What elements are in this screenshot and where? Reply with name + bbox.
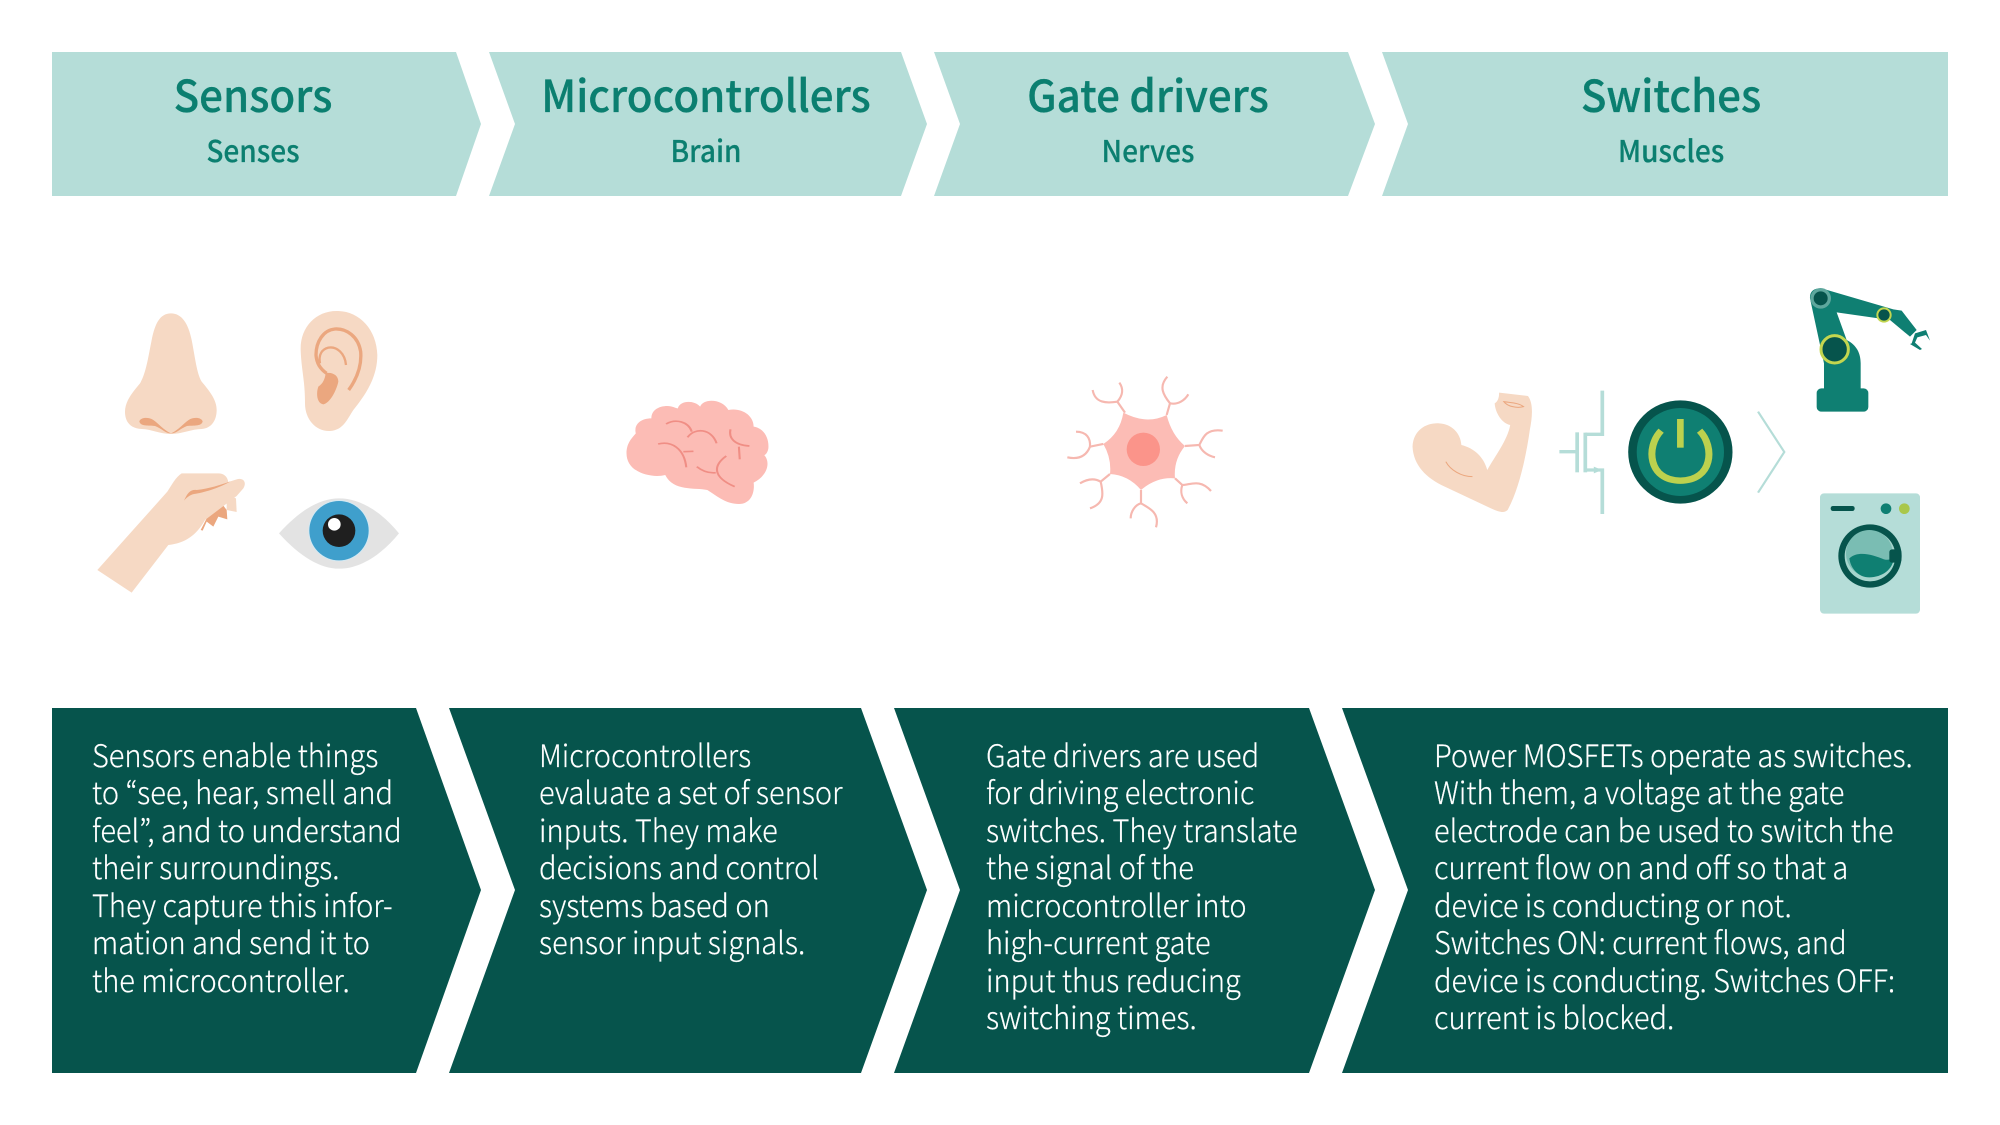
icon: robot arm <box>1810 288 1930 412</box>
icon: hand <box>97 473 245 593</box>
text: microcontrollers description: sensor input signals. <box>539 918 805 963</box>
text: gate drivers description: for driving electronic <box>986 768 1254 813</box>
text: gate drivers description: Gate drivers are used <box>986 731 1259 776</box>
text: sensors description: mation and send it to <box>92 918 370 963</box>
icon: MOSFET symbol <box>1559 391 1602 514</box>
text: switches description: device is conducting. Switches OFF: <box>1434 956 1895 1001</box>
text: microcontrollers description <box>539 731 843 963</box>
icon: brain <box>627 401 768 504</box>
text: sensors description: Sensors enable things <box>92 731 378 776</box>
text: switches description: device is conducting or not. <box>1434 881 1792 926</box>
text: microcontrollers description: inputs. They make <box>539 806 778 851</box>
text: sensors description: They capture this infor- <box>92 881 393 926</box>
text: microcontrollers description: Microcontrollers <box>539 731 751 776</box>
heading: Gate drivers: Gate drivers <box>1027 60 1269 124</box>
panel: switches header <box>1382 52 1948 196</box>
text: gate drivers description: switches. They translate <box>986 806 1298 851</box>
icons: switches group <box>1413 391 1784 514</box>
panel: gate drivers description <box>894 708 1375 1073</box>
text: microcontrollers description: systems based on <box>539 881 770 926</box>
subheading: Senses: Senses <box>206 126 300 170</box>
text: switches description: current is blocked. <box>1434 993 1674 1038</box>
arrow: chevron to applications <box>1758 412 1784 493</box>
text: gate drivers description: switching times. <box>986 993 1197 1038</box>
icon: eye <box>279 498 399 569</box>
icon: flexed arm <box>1413 393 1532 512</box>
icon: neuron <box>1067 377 1223 527</box>
icon: ear <box>301 311 377 431</box>
subheading: Brain: Brain <box>670 126 742 170</box>
text: switches description: Switches ON: current flows, and <box>1434 918 1847 963</box>
icon: washing machine <box>1820 493 1920 614</box>
panel: microcontrollers header <box>489 52 927 196</box>
panel: microcontrollers description <box>449 708 927 1073</box>
subheading: Nerves: Nerves <box>1101 126 1195 170</box>
panel: sensors header <box>52 52 481 196</box>
text: gate drivers description: microcontroller into <box>986 881 1247 926</box>
panel: sensors description <box>52 708 481 1073</box>
icon: power button <box>1628 400 1733 504</box>
text: gate drivers description: high-current gate <box>986 918 1211 963</box>
text: switches description: current flow on and off so that a <box>1434 843 1848 888</box>
heading: Sensors: Sensors <box>174 60 332 124</box>
text: gate drivers description <box>986 731 1298 1038</box>
text: switches description: With them, a voltage at the gate <box>1434 768 1844 813</box>
text: gate drivers description: input thus reducing <box>986 956 1241 1001</box>
heading: Microcontrollers: Microcontrollers <box>541 60 871 124</box>
subheading: Muscles: Muscles <box>1618 126 1724 170</box>
text: sensors description: the microcontroller. <box>92 956 350 1001</box>
text: gate drivers description: the signal of the <box>986 843 1194 888</box>
text: switches description: electrode can be used to switch the <box>1434 806 1894 851</box>
text: sensors description: to “see, hear, smell and <box>92 768 393 813</box>
text: sensors description: their surroundings. <box>92 843 339 888</box>
text: switches description <box>1434 731 1913 1038</box>
panel: gate drivers header <box>934 52 1375 196</box>
panel: switches description <box>1342 708 1948 1073</box>
icon: senses group <box>125 311 399 569</box>
icon: nose <box>125 313 217 434</box>
text: microcontrollers description: evaluate a set of sensor <box>539 768 842 813</box>
text: sensors description: feel”, and to understand <box>92 806 402 851</box>
heading: Switches: Switches <box>1581 60 1761 124</box>
text: switches description: Power MOSFETs operate as switches. <box>1434 731 1913 776</box>
text: microcontrollers description: decisions and control <box>539 843 819 888</box>
text: sensors description <box>92 731 402 1001</box>
